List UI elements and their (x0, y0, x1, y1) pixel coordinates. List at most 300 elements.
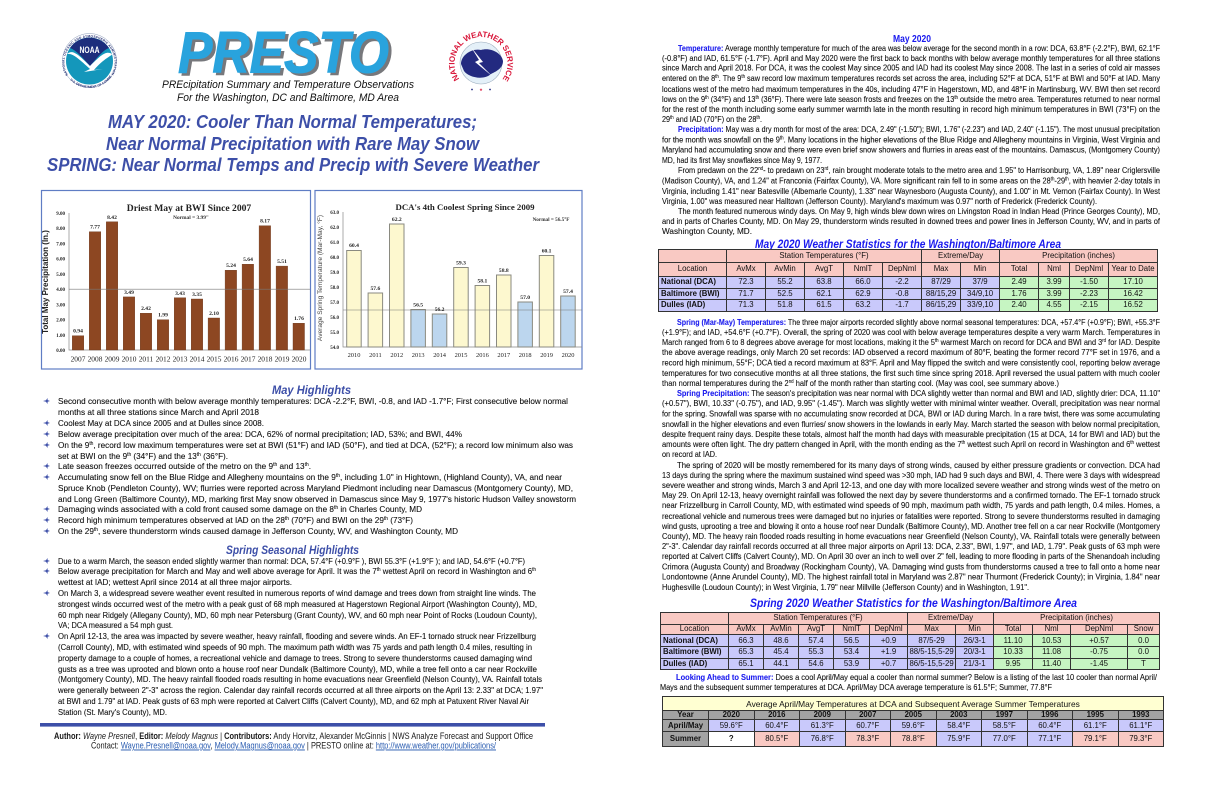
text block: May highlights list: months at all three stations since March and April 2018 (58, 407, 259, 417)
bar chart: DCA coolest spring: DCA's 4th Coolest Spring Since 2009 (395, 202, 535, 212)
text block: Spring highlights list: strongest winds occurred west of the metro with a peak gust of 68 mph measured at Hagerstown Regional Airport (Washington County), MD, (58, 599, 537, 609)
bar chart: Driest May at BWI: 2013 (173, 354, 188, 364)
table: Spring 2020 statistics: 26/3-1 (964, 636, 986, 644)
text block: May 2020 narrative: for the month was snowfall on the 9th. Many locations in the higher elevations of the Blue Ridge and Allegheny mountains in Virginia, West Virginia and (662, 134, 1160, 144)
bar chart: DCA coolest spring: 62.2 (392, 217, 402, 223)
table: May 2020 statistics: Dulles (IAD) (661, 300, 705, 309)
table: April/May and summer temperatures at DCA: 60.7°F (856, 720, 879, 730)
text block: Spring narrative: May 29. On April 12-13, heavy overnight rainfall was followed the next day by severe thunderstorms and a confirmed tornado. The EF-1 tornado struck (662, 490, 1161, 500)
table: April/May and summer temperatures at DCA: Average April/May Temperatures at DCA and Subsequent Average Summer Temperatures (746, 698, 1080, 708)
table: May 2020 statistics: 66.0 (855, 277, 871, 286)
text block: May 2020 narrative: Precipitation: May was a dry month for most of the area: DCA, 2.49" (-1.50"); BWI, 1.76" (-2.23") and IAD, 2.40" (-1.15"). The most unusual precipitation (678, 124, 1160, 134)
bar chart: Driest May at BWI: 2.10 (209, 311, 219, 317)
text block: Spring highlights list: were generally between 2"-3" across the region. Calendar day rainfall records occurred at all three airports on the April 13: 2.33" at DCA; 1.97" (57, 685, 543, 695)
text block: Looking Ahead to Summer: Looking Ahead to Summer: Does a cool April/May equal a cooler than normal summer? Below is a listing of the last 10 cooler than normal April/ (676, 672, 1158, 682)
bar chart: Driest May at BWI: 0.94 (73, 329, 83, 335)
bar chart: Driest May at BWI: 5.00 (56, 273, 66, 278)
table: April/May and summer temperatures at DCA: 60.4°F (1038, 720, 1061, 730)
bar chart: Driest May at BWI: 0.00 (56, 349, 66, 354)
table: May 2020 statistics: 86/15,29 (926, 300, 956, 309)
bar chart: Driest May at BWI: 2017 (241, 354, 256, 364)
table: May 2020 statistics: 88/15,29 (926, 289, 956, 298)
text block: Spring narrative: wind gusts, uprooting a tree and blowing it onto a house roof near Dundalk (Baltimore County), MD. Another tree fell on a car near Rockville (Montgomery (661, 521, 1161, 531)
table: Spring 2020 statistics: Total (1005, 624, 1021, 633)
bar chart: DCA coolest spring: 2013 (412, 352, 425, 359)
text block: Spring narrative: Spring (Mar-May) Temperatures: The three major airports recorded slightly above normal seasonal temperatures: DCA, +57.4°F (+0.9°F); BWI, +55.3°F (677, 317, 1160, 327)
table: Spring 2020 statistics: Precipitation (inches) (1040, 613, 1113, 622)
table: April/May and summer temperatures at DCA: April/May (668, 720, 703, 730)
table: Spring 2020 statistics: +0.9 (881, 636, 896, 644)
text block: May highlights list: Coolest May at DCA since 2005 and at Dulles since 2008. (58, 418, 264, 428)
title: SPRING: Near Normal Temps and Precip with Severe Weather (47, 154, 541, 175)
table: Spring 2020 statistics: Location (680, 624, 709, 633)
text block: May 2020 narrative: The month featured numerous windy days. On May 9, high winds blew down wires on Livingston Road in Indian Head (Prince Georges County), MD, (678, 206, 1160, 216)
bar chart: Driest May at BWI: 4.00 (56, 288, 66, 293)
text block: May highlights list: and Long Green (Baltimore County), MD, marking first May snow observed in Damascus since May 9, 1977's historic Hudson Valley snowstorm (58, 494, 576, 504)
bar chart: DCA coolest spring: 62.0 (330, 226, 340, 231)
text block: Spring narrative: reported at Calvert Cliffs (Calvert County), MD. On April 30 over an inch to well over 2" fell, leading to more flooding in parts of the Shenandoah including (662, 551, 1160, 561)
table: Spring 2020 statistics: 87/5-29 (918, 636, 945, 644)
bar chart: Driest May at BWI: 2014 (190, 354, 205, 364)
text block: Spring narrative: temperatures for two consecutive months at all three stations, the first such time since spring 2018. April reversed the usual pattern with much cooler (662, 368, 1160, 378)
table: Spring 2020 statistics: 10.53 (1042, 636, 1061, 644)
table: May 2020 statistics: -1.7 (895, 300, 909, 309)
text block: May 2020 narrative: (Madison County), VA, and 1.24" at Franconia (Fairfax County), VA. More significant rain fell to in some areas on the 28th-29th, with heavier 2-day totals in (662, 176, 1160, 186)
table: Spring 2020 statistics: -1.45 (1090, 658, 1108, 668)
table: Spring 2020 statistics: 53.4 (844, 647, 859, 656)
text block: Spring narrative: 13 days during the spring where the maximum sustained wind speed was >30 mph, IAD had 9 such days and BWI, 4. There were 3 days with widespread (662, 470, 1160, 480)
table: April/May and summer temperatures at DCA: 61.1°F (1129, 720, 1152, 730)
table: May 2020 statistics: -0.8 (895, 289, 909, 298)
text block: May highlights list: Accumulating snow fell on the Blue Ridge and Allegheny mountains on the 9th, including 1.0" in Hightown, (Highland County), VA, and near (58, 472, 562, 482)
table: May 2020 statistics: 17.10 (1123, 277, 1143, 286)
table: May 2020 statistics: -2.23 (1080, 289, 1098, 298)
text block: May 2020 narrative: for the rest of the month including some early summer warmth late in the month resulting in record high minimum temperatures in BWI (73°F) on the (662, 104, 1160, 114)
title: MAY 2020: Cooler Than Normal Temperatures; (108, 111, 477, 132)
text block: Spring narrative: Hughesville (Loudoun County); in West Virginia, 1.79" near Millville (Jefferson County) and in Washington, 1.91". (662, 582, 1029, 592)
table: Spring 2020 statistics (660, 612, 1160, 670)
text block: May 2020 narrative: MD, had its first May snowflakes since May 9, 1977. (662, 155, 822, 165)
text block: Spring narrative (661, 317, 1161, 592)
text block: May 2020 narrative: Washington County, MD. (662, 226, 752, 236)
table: Spring 2020 statistics: 53.9 (844, 658, 859, 668)
heading: May Highlights: May Highlights (272, 385, 351, 397)
bar chart: DCA coolest spring: 60.1 (542, 248, 552, 254)
table: May 2020 statistics: National (DCA) (661, 277, 716, 286)
bar chart: DCA coolest spring: 57.4 (563, 289, 573, 295)
text block: May 2020 narrative: entered on the 8th. The 9th saw record low maximum temperatures records set across the area, including 52°F at DCA, 51°F at BWI and 50°F at IAD. Many (662, 73, 1161, 83)
text block: Spring highlights list: Due to a warm March, the season ended slightly warmer than normal: DCA, 57.4°F (+0.9°F ), BWI 55.3°F (+1.9°F ); and IAD, 54.6°F (+0.7°F) (58, 556, 525, 566)
text block: May highlights list: Record high minimum temperatures observed at IAD on the 28th (70°F) and BWI on the 29th (73°F) (58, 515, 413, 525)
bar chart: Driest May at BWI: 2010 (122, 354, 137, 364)
text block: Spring narrative: March ranged from 6 to 8 degrees above average for most locations, making it the 5th warmest March on record for DCA and BWI and 3rd for IAD. Despite (662, 337, 1160, 347)
text block: Spring narrative: Londontowne (Anne Arundel County), MD. The highest rainfall total in Maryland was 2.87" near Thurmont (Frederick County); in Virginia, 1.84" near (662, 572, 1160, 582)
table: Spring 2020 statistics: 11.10 (1004, 636, 1023, 644)
table: April/May and summer temperatures at DCA (662, 696, 1164, 747)
text block: Spring highlights list: Station (St. Mary's County), MD. (58, 707, 167, 717)
table: April/May and summer temperatures at DCA: 60.4°F (765, 720, 788, 730)
table: May 2020 statistics: 61.5 (816, 300, 832, 309)
text block: May 2020 narrative: (-0.8°F) and IAD, 61.5°F (-1.7°F). April and May 2020 were the first back to back months with below average monthly temperatures for all three stations (662, 53, 1160, 63)
table: May 2020 statistics: -2.15 (1080, 300, 1098, 309)
bar chart: Driest May at BWI: Normal = 3.99" (173, 215, 209, 221)
bar chart: DCA coolest spring: 2018 (519, 352, 532, 359)
table: April/May and summer temperatures at DCA: 61.1°F (1084, 720, 1107, 730)
table: Spring 2020 statistics: 20/3-1 (964, 647, 986, 656)
bar chart: DCA coolest spring: 56.2 (435, 307, 445, 313)
bar chart: DCA coolest spring: 58.8 (499, 268, 509, 274)
table: Spring 2020 statistics: AvMx (736, 624, 756, 633)
table: Spring 2020 statistics: 65.1 (738, 658, 754, 668)
bar chart: DCA coolest spring: 2019 (540, 352, 553, 359)
table: Spring 2020 statistics: 88/5-15,5-29 (909, 647, 954, 656)
text block: Spring narrative: Spring Precipitation: The season's precipitation was near normal with DCA slightly wetter than normal and BWI and IAD, slightly drier: DCA, 11.10" (677, 388, 1160, 398)
table: Spring 2020 statistics: 9.95 (1005, 658, 1021, 668)
table: Spring 2020 statistics: -0.75 (1090, 647, 1108, 656)
bar chart: Driest May at BWI: 2007 (71, 354, 86, 364)
table: May 2020 statistics: 33/9,10 (967, 300, 993, 309)
text block: Spring narrative: snowfall in the higher elevations and even flurries/ snow showers in the lowlands in early May. March started the season with below normal precipitation, (662, 419, 1160, 429)
bar chart: Driest May at BWI: 1.00 (56, 334, 66, 339)
table: Spring 2020 statistics: 10.33 (1003, 647, 1023, 656)
bar chart: Driest May at BWI (41, 190, 310, 369)
table: Spring 2020 statistics: +0.57 (1089, 636, 1109, 644)
table: April/May and summer temperatures at DCA: 58.5°F (993, 720, 1016, 730)
table: April/May and summer temperatures at DCA: 75.9°F (947, 734, 970, 743)
table: Spring 2020 statistics: Baltimore (BWI) (663, 647, 721, 656)
text block: May highlights list: set at BWI on the 9th (34°F) and the 13th (36°F). (58, 451, 228, 461)
bar chart: Driest May at BWI: 2015 (207, 354, 222, 364)
text block: Spring narrative: amounts were often light. The dry pattern changed in April, with the month ending as the 7th wettest such April on record in Washington and 6th wettest (662, 439, 1161, 449)
bar chart: DCA coolest spring: 61.0 (330, 241, 340, 246)
table: May 2020 statistics (658, 249, 1158, 312)
table: May 2020 statistics: Total (1011, 264, 1027, 273)
bar chart: Driest May at BWI: 3.43 (175, 291, 185, 297)
table: Spring 2020 statistics: Extreme/Day (928, 613, 973, 622)
table: Spring 2020 statistics: T (1141, 658, 1146, 668)
text block: Spring narrative: severe weather and strong winds, March 3 and April 12-13, and one day with more localized severe weather and strong winds west of the metro on (662, 480, 1160, 490)
text block: May 2020 narrative (662, 43, 1161, 236)
bar chart: Driest May at BWI: 2008 (88, 354, 103, 364)
logo: PRESTO wordmark: PRESTO (178, 20, 389, 86)
table: May 2020 statistics: 63.8 (816, 277, 832, 286)
table: Spring 2020 statistics: 11.08 (1042, 647, 1061, 656)
bar chart: Driest May at BWI: 2.00 (56, 318, 66, 324)
table: Spring 2020 statistics: Max (924, 624, 939, 633)
table: Spring 2020 statistics: DepNml (874, 624, 903, 633)
text block: Spring highlights list: Below average precipitation for March and May and well above average for April. It was the 7th wettest April on record in Washington and 6th (58, 566, 536, 576)
bar chart: Driest May at BWI: 2018 (258, 354, 273, 364)
table: May 2020 statistics: 37/9 (972, 277, 988, 286)
bar chart: DCA coolest spring: 57.0 (330, 301, 340, 306)
table: Spring 2020 statistics: 57.4 (808, 636, 824, 644)
table: May 2020 statistics: 62.1 (816, 289, 832, 298)
bar chart: Driest May at BWI: 2.42 (141, 306, 151, 312)
subtitle: PREcipitation Summary and Temperature Observations (162, 79, 414, 91)
table: April/May and summer temperatures at DCA: 59.6°F (902, 720, 925, 730)
bar chart: Driest May at BWI: 1.76 (294, 316, 304, 322)
table: May 2020 statistics: 2.49 (1011, 277, 1027, 286)
table: April/May and summer temperatures at DCA: 80.5°F (765, 734, 788, 743)
bar chart: DCA coolest spring: 2010 (348, 352, 360, 359)
table: May 2020 statistics: Location (678, 264, 707, 273)
table: May 2020 statistics: AvMx (736, 264, 756, 273)
text block: May 2020 narrative: locations west of the metro had maximum temperatures in the 40s, including 47°F in Hagerstown, MD, and 48°F in Martinsburg, WV. BWI then set record (662, 84, 1160, 94)
table: May 2020 statistics: -2.2 (895, 277, 909, 286)
table: April/May and summer temperatures at DCA: 77.0°F (993, 734, 1016, 743)
table: Spring 2020 statistics: 54.6 (808, 658, 824, 668)
text block: Looking Ahead to Summer: Mays and the subsequent summer temperatures at DCA. April/May DCA average temperature is 61.5°F; Summer, 77.8°F (660, 682, 1052, 692)
text block: Spring narrative: on record at IAD. (662, 449, 717, 459)
bar chart: DCA coolest spring: 2020 (562, 352, 574, 359)
bar chart: DCA coolest spring (315, 190, 582, 369)
table: Spring 2020 statistics: National (DCA) (663, 636, 718, 644)
table: May 2020 statistics: Station Temperatures (°F) (779, 251, 869, 260)
bar chart: Driest May at BWI: 8.00 (56, 227, 66, 232)
title: Near Normal Precipitation with Rare May Snow (106, 133, 480, 154)
table: Spring 2020 statistics: Nml (1045, 624, 1058, 633)
table: Spring 2020 statistics: 21/3-1 (964, 658, 986, 668)
text block: Spring highlights list (43, 556, 543, 717)
table: May 2020 statistics: 1.76 (1011, 289, 1027, 298)
table: April/May and summer temperatures at DCA: 77.1°F (1038, 734, 1061, 743)
bar chart: DCA coolest spring: 59.0 (330, 271, 340, 276)
table: April/May and summer temperatures at DCA: 79.1°F (1084, 734, 1107, 743)
heading: May statistics table: May 2020 Weather Statistics for the Washington/Baltimore Area (755, 239, 1062, 251)
bar chart: Driest May at BWI: 8.42 (107, 215, 117, 221)
table: Spring 2020 statistics: Station Temperatures (°F) (773, 613, 863, 622)
bar chart: DCA coolest spring: 58.1 (478, 278, 487, 284)
table: May 2020 statistics: 3.99 (1046, 289, 1062, 298)
heading: May 2020: May 2020 (893, 33, 931, 45)
table: April/May and summer temperatures at DCA: 61.3°F (811, 720, 834, 730)
table: Spring 2020 statistics: 55.3 (808, 647, 824, 656)
text block: Spring narrative: the above average readings, only March 20 set records: IAD observed a record maximum of 80°F, beating the former record 77°F set in 1976, and a (662, 347, 1160, 357)
icon: National Weather Service logo: NATIONAL WEATHER SERVICE (448, 31, 514, 82)
footer credits: Contact: Wayne.Presnell@noaa.gov, Melody.Magnus@noaa.gov | PRESTO online at: http://www.weather.gov/publications/ (91, 740, 496, 750)
text block: Spring highlights list: On April 12-13, the area was impacted by severe weather, heavy rainfall, flooding and severe winds. An EF-1 tornado struck near Frizzellburg (58, 631, 536, 641)
bar chart: Driest May at BWI: Total May Precipitation (In.) (41, 230, 50, 334)
table: Spring 2020 statistics: AvMin (770, 624, 792, 633)
table: May 2020 statistics: Year to Date (1112, 264, 1155, 273)
text block: May 2020 narrative: Virginia, 1.00" was measured near Halltown (Jefferson County). Maryland's maximum was 0.97" north of Frederick (Frederick County). (662, 196, 1097, 206)
bar chart: Driest May at BWI: 6.00 (56, 258, 66, 262)
text block: Spring highlights list: wettest at IAD; wettest April since 2014 at all three major airports. (57, 577, 292, 587)
table: April/May and summer temperatures at DCA: ? (729, 734, 734, 743)
text block: May highlights list: Spruce Knob (Pendleton County), WV; flurries were reported across Maryland Piedmont including near Damascus (Montgomery County), MD, (58, 483, 573, 493)
bar chart: Driest May at BWI: 2016 (224, 354, 239, 364)
text block: Spring highlights list: gusts as a tree was uprooted and blown onto a house roof near Dundalk (Baltimore County), MD, while a tree fell onto a car near Rockville (58, 664, 537, 674)
bar chart: Driest May at BWI: 2019 (275, 354, 290, 364)
bar chart: DCA coolest spring: 55.0 (330, 331, 340, 336)
text block: Spring highlights list: (Montgomery County), MD. The heavy rainfall flooded roads resulting in home evacuations near Greenfield (Nelson County), VA. Rainfall totals (58, 674, 542, 684)
footer credits (54, 730, 533, 750)
table: May 2020 statistics: 52.5 (777, 289, 793, 298)
bar chart: DCA coolest spring: 56.5 (413, 302, 423, 308)
bar chart: Driest May at BWI: 2012 (156, 354, 171, 364)
bar chart: DCA coolest spring: 59.3 (456, 260, 466, 266)
bar chart: Driest May at BWI: 1.99 (158, 313, 168, 319)
table: Spring 2020 statistics: Min (968, 624, 981, 633)
table: Spring 2020 statistics: +1.9 (881, 647, 896, 656)
text block: Spring narrative: The spring of 2020 will be mostly remembered for its many days of strong winds, caused by either pressure gradients or convection. DCA had (677, 460, 1160, 470)
text block: Spring highlights list: property damage to a couple of homes, a recreational vehicle and damage to trees. Strong to severe thunderstorms caused damaging wind (58, 653, 532, 663)
bar chart: DCA coolest spring: 63.0 (330, 211, 340, 216)
table: May 2020 statistics: 71.3 (738, 300, 754, 309)
table: May 2020 statistics: Precipitation (inches) (1042, 251, 1115, 260)
text block: Spring narrative: (+0.57"), BWI, 10.33" (-0.75"), and IAD, 9.95" (-1.45"). March was slightly wetter with minimal winter weather. Overall, precipitation was near normal (662, 398, 1160, 408)
table: May 2020 statistics: -1.50 (1080, 277, 1098, 286)
bar chart: Driest May at BWI: Driest May at BWI Since 2007 (127, 203, 251, 214)
table: April/May and summer temperatures at DCA: 79.3°F (1129, 734, 1152, 743)
table: April/May and summer temperatures at DCA: 58.4°F (947, 720, 970, 730)
text block: May 2020 narrative: since March and April 2018. For DCA, it was the coolest May since 2005 and IAD had its coolest May since 2008. The last in a series of cold air masses (662, 62, 1160, 72)
bar chart: DCA coolest spring: 2014 (433, 352, 447, 359)
table: May 2020 statistics: DepNml (888, 264, 916, 273)
text block: Looking Ahead to Summer (660, 672, 1158, 692)
table: April/May and summer temperatures at DCA: 78.8°F (902, 734, 925, 743)
footer divider bar (40, 723, 545, 727)
heading: Spring statistics table: Spring 2020 Weather Statistics for the Washington/Baltimore Area (750, 598, 1078, 610)
text block: Spring highlights list: (Carroll County), MD, with estimated wind speeds of 90 mph. The maximum path width was 75 yards and path length 0.4 miles, resulting in (58, 642, 532, 652)
table: May 2020 statistics: 3.99 (1046, 277, 1062, 286)
text block: May 2020 narrative: 29th and IAD (70°F) on the 28th. (662, 114, 762, 124)
bar chart: DCA coolest spring: 57.0 (520, 295, 530, 301)
text block: Spring highlights list: at BWI and 1.79" at IAD. Peak gusts of 63 mph were reported at Calvert Cliffs (Calvert County), MD, and 62 mph at Patuxent River Naval Air (58, 696, 529, 706)
bar chart: DCA coolest spring: 57.6 (371, 286, 380, 292)
table: April/May and summer temperatures at DCA: 78.3°F (856, 734, 879, 743)
text block: May highlights list: Damaging winds associated with a cold front caused some damage on the 8th in Charles County, MD (58, 504, 422, 514)
text block: May highlights list: Below average precipitation over much of the area: DCA, 62% of normal precipitation; IAD, 53%; and BWI, 44% (58, 429, 463, 439)
text block: May highlights list: Second consecutive month with below average monthly temperatures: DCA -2.2°F, BWI, -0.8, and IAD -1.7°F; First consecutive below normal (58, 396, 568, 406)
text block: Spring highlights list: 60 mph near Ridgely (Allegany County), MD, 60 mph near Petersburg (Grant County), WV, and 60 mph near Point of Rocks (Loudoun County), (58, 610, 537, 620)
text block: Spring narrative: record high minimum, 55°F; DCA tied a record maximum at 83°F. April and May flipped the switch and were consistently cool, reporting below average (662, 358, 1160, 368)
table: May 2020 statistics: Max (934, 264, 948, 273)
table: Spring 2020 statistics: 44.1 (773, 658, 789, 668)
bar chart: Driest May at BWI: 2011 (139, 354, 154, 364)
table: May 2020 statistics: 63.2 (855, 300, 871, 309)
bar chart: DCA coolest spring: 2015 (455, 352, 467, 359)
subtitle: For the Washington, DC and Baltimore, MD Area (177, 92, 399, 104)
text block: Spring narrative: 2"-3". Calendar day rainfall records occurred at all three major airports on April 13: DCA, 2.33", BWI, 1.97", and IAD, 1.79". Peak gusts of 63 mph were (662, 541, 1160, 551)
table: Spring 2020 statistics: NmlT (842, 624, 861, 633)
table: Spring 2020 statistics: +0.7 (881, 658, 896, 668)
text block: May 2020 narrative: Virginia, including 1.41" near Batesville (Albemarle County), 1.33" near Waynesboro (Augusta County), and 1.00" in Mt. Vernon (Fairfax County). In West (662, 186, 1161, 196)
bar chart: DCA coolest spring: 60.0 (330, 256, 340, 261)
table: May 2020 statistics: 72.3 (738, 277, 754, 286)
text block: May highlights list (43, 396, 576, 536)
bar chart: Driest May at BWI: 7.77 (90, 225, 100, 231)
text block: Spring narrative: (+1.9°F); and IAD, +54.6°F (+0.7°F). Overall, the spring of 2020 was cool with below average temperatures despite a very warm March. Temperatures in (662, 327, 1160, 337)
text block: Spring narrative: recreational vehicle and numerous trees were damaged but no injuries or fatalities were reported. Strong to severe thunderstorms resulted in damaging (662, 511, 1160, 521)
bar chart: DCA coolest spring: 56.0 (330, 316, 340, 321)
text block: May highlights list: On the 29th, severe thunderstorm winds caused damage in Jefferson County, WV, and Washington County, MD (58, 526, 458, 536)
bar chart: DCA coolest spring: 54.0 (330, 346, 340, 351)
bar chart: DCA coolest spring: 2017 (497, 352, 511, 359)
bar chart: Driest May at BWI: 7.00 (56, 242, 66, 248)
text block: May 2020 narrative: and in parts of Charles County, MD. On May 29, thunderstorm winds resulted in downed trees and power lines in Jefferson County, WV, and in parts of (662, 216, 1161, 226)
table: May 2020 statistics: 71.7 (738, 289, 754, 298)
table: April/May and summer temperatures at DCA: 76.8°F (811, 734, 834, 743)
table: May 2020 statistics: 16.52 (1123, 300, 1143, 309)
table: Spring 2020 statistics: 11.40 (1042, 658, 1061, 668)
table: April/May and summer temperatures at DCA: Summer (670, 734, 701, 743)
table: May 2020 statistics: DepNml (1075, 264, 1103, 273)
table: May 2020 statistics: Nml (1047, 264, 1061, 273)
bar chart: DCA coolest spring: 2012 (390, 352, 403, 359)
icon: NOAA logo: NOAA (80, 45, 100, 55)
table: May 2020 statistics: Min (974, 264, 986, 273)
bar chart: Driest May at BWI: 5.64 (243, 257, 253, 263)
bar chart: DCA coolest spring: 2016 (476, 352, 489, 359)
bar chart: Driest May at BWI: 2009 (105, 354, 120, 364)
table: Spring 2020 statistics: 0.0 (1138, 636, 1149, 644)
table: May 2020 statistics: Baltimore (BWI) (661, 289, 719, 298)
bar chart: Driest May at BWI: 9.00 (56, 212, 66, 217)
table: May 2020 statistics: AvgT (815, 264, 833, 273)
table: Spring 2020 statistics: 0.0 (1138, 647, 1149, 656)
table: May 2020 statistics: 55.2 (777, 277, 793, 286)
text block: Spring highlights list: On March 3, a widespread severe weather event resulted in numerous reports of wind damage and trees down from straight line winds. The (58, 588, 536, 598)
subtitle (162, 79, 414, 104)
title (47, 111, 541, 175)
table: May 2020 statistics: NmlT (854, 264, 872, 273)
table: Spring 2020 statistics: AvgT (807, 624, 825, 633)
bar chart: Driest May at BWI: 5.24 (226, 263, 236, 269)
table: Spring 2020 statistics: Dulles (IAD) (663, 658, 707, 668)
table: May 2020 statistics: 2.40 (1011, 300, 1027, 309)
table: Spring 2020 statistics: DepNml (1085, 624, 1113, 633)
text block: Spring narrative: Crimora (Augusta County) and Broadway (Rockingham County), VA. Damaging wind gusts from thunderstorms caused a tree to fall onto a home near (662, 562, 1160, 572)
bar chart: DCA coolest spring: 2011 (369, 352, 382, 359)
table: Spring 2020 statistics: 45.4 (773, 647, 789, 656)
text block: Spring narrative: for the spring. Snowfall was sparse with no accumulating snow recorded at DCA, BWI or IAD during March. In a rare twist, there was some accumulating (662, 408, 1160, 418)
table: May 2020 statistics: 4.55 (1046, 300, 1062, 309)
text block: May highlights list: On the 9th, record low maximum temperatures were set at BWI (51°F) and IAD (50°F), and tied at DCA, (52°F); a record low minimum also was (58, 440, 573, 450)
text block: May 2020 narrative: Maryland had accumulating snow and there were even brief snow showers and flurries in areas east of the mountains. Damascus, (Montgomery County) (662, 144, 1160, 154)
bar chart: Driest May at BWI: 8.17 (260, 219, 270, 225)
table: Spring 2020 statistics: 48.6 (773, 636, 789, 644)
table: May 2020 statistics: Extreme/Day (938, 251, 983, 260)
bar chart: DCA coolest spring: 58.0 (330, 286, 340, 291)
bar chart: DCA coolest spring: Average Spring Temperature (Mar-May, °F) (316, 215, 324, 341)
icon: NOAA logo: NATIONAL OCEANIC AND ATMOSPHERIC ADMINISTRATION (62, 35, 117, 76)
bar chart: Driest May at BWI: 3.49 (124, 290, 134, 296)
heading: Spring Seasonal Highlights: Spring Seasonal Highlights (226, 545, 359, 557)
text block: Spring narrative: despite frequent rainy days. Despite these totals, almost half the month had days with measurable precipitation (15 at DCA, 14 for BWI and IAD) but the (662, 429, 1160, 439)
text block: Spring narrative: than normal temperatures during the 2nd half of the month rather than starting cool. (May was cool, see summary above.) (662, 378, 1059, 388)
table: Spring 2020 statistics: Snow (1134, 624, 1153, 633)
table: May 2020 statistics: 34/9,10 (967, 289, 993, 298)
text block: Spring narrative: near Frizzellburg in Carroll County, MD, with estimated wind speeds of 90 mph, maximum path width, 75 yards and path length, 0.4 miles. Homes, a (662, 500, 1160, 510)
bar chart: Driest May at BWI: 3.00 (56, 304, 66, 308)
logo: PRESTO wordmark: PRESTO (181, 23, 392, 88)
table: May 2020 statistics: AvMin (774, 264, 796, 273)
bar chart: Driest May at BWI: 3.35 (192, 292, 202, 298)
table: May 2020 statistics: 51.8 (777, 300, 793, 309)
table: Spring 2020 statistics: 56.5 (844, 636, 859, 644)
table: May 2020 statistics: 62.9 (855, 289, 871, 298)
bar chart: DCA coolest spring: 60.4 (349, 243, 359, 249)
table: May 2020 statistics: 87/29 (931, 277, 951, 286)
text block: May highlights list: Late season freezes occurred outside of the metro on the 9th and 13th. (58, 461, 311, 471)
table: Spring 2020 statistics: 66.3 (738, 636, 754, 644)
bar chart: DCA coolest spring: Normal = 56.5°F (533, 216, 569, 223)
text block: Spring narrative: County), MD. The heavy rain flooded roads resulting in home evacuations near Greenfield (Nelson County), VA. Rainfall totals were generally between (662, 531, 1160, 541)
table: Spring 2020 statistics: 86/5-15,5-29 (909, 658, 954, 668)
footer credits: Author: Wayne Presnell, Editor: Melody Magnus | Contributors: Andy Horvitz, Alexander McGinnis | NWS Analyze Forecast and Support Office (54, 730, 533, 741)
text block: Spring highlights list: VA; DCA measured a 54 mph gust. (58, 620, 173, 630)
